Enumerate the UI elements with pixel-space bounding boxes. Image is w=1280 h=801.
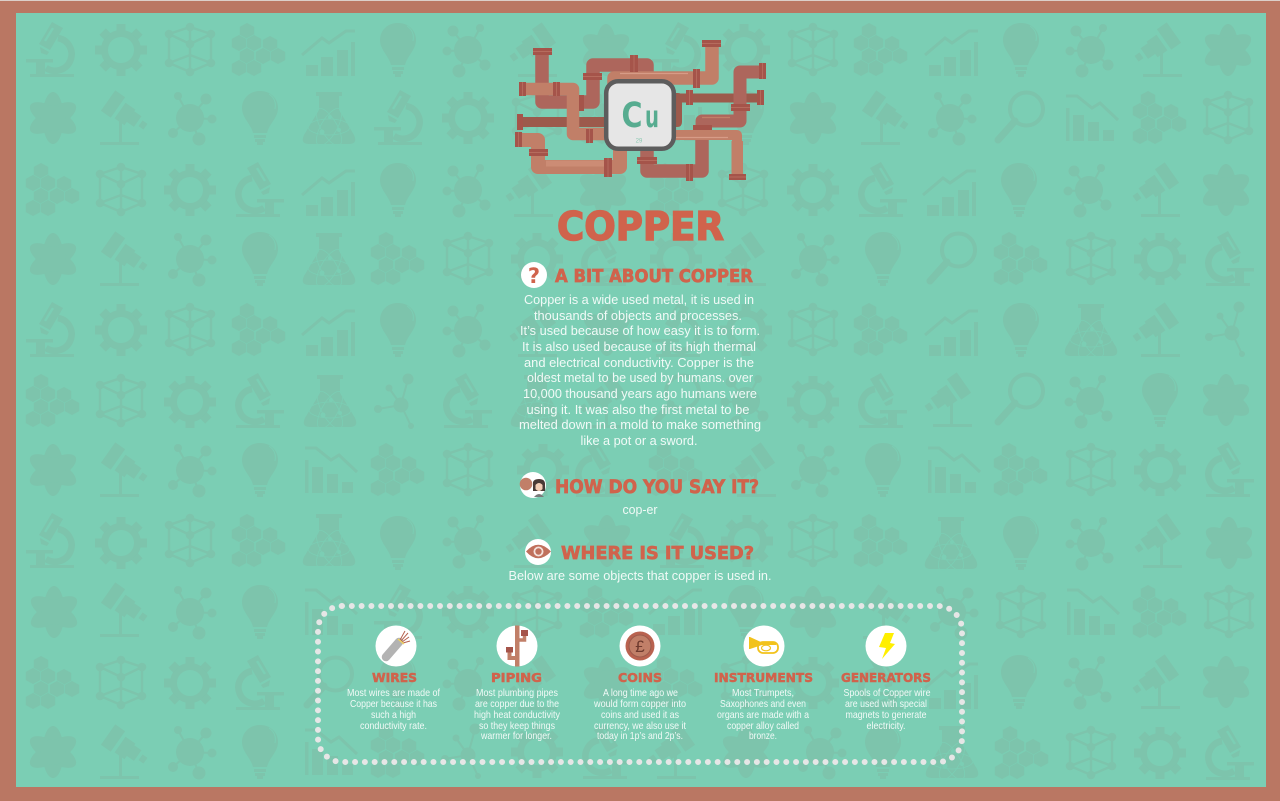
use: coins: [593, 626, 686, 742]
about copper text block: like a pot or a sword.: [580, 433, 698, 448]
description: Most Trumpets,: [732, 688, 794, 699]
description: bronze.: [749, 731, 777, 742]
icon: trumpet: [744, 626, 784, 666]
heading: how do you say it: HOW DO YOU SAY IT?: [555, 476, 759, 498]
description: such a high: [371, 710, 416, 721]
about copper text block: It is also used because of its high thermal: [522, 339, 756, 354]
about copper text block: melted down in a mold to make something: [519, 417, 761, 432]
description: currency, we also use it: [594, 721, 686, 732]
description: are copper due to the: [475, 699, 559, 710]
description: Copper because it has: [350, 699, 437, 710]
description: copper alloy called: [727, 721, 799, 732]
copper element tile: [606, 81, 674, 149]
pronunciation text: cop-er: [622, 502, 658, 517]
copper pipes illustration: [515, 40, 766, 181]
description: [844, 688, 931, 732]
use: piping: [474, 626, 561, 742]
use: generators: [841, 626, 931, 732]
about copper text block: thousands of objects and processes.: [534, 308, 742, 323]
description: [474, 688, 561, 742]
description: would form copper into: [593, 699, 686, 710]
description: so they keep things: [479, 721, 555, 732]
description: high heat conductivity: [474, 710, 561, 721]
description: [593, 688, 686, 742]
description: warmer for longer.: [480, 731, 552, 742]
icon: question mark: [521, 262, 547, 288]
description: Most wires are made of: [347, 688, 440, 699]
about copper text block: oldest metal to be used by humans. over: [527, 370, 754, 385]
copper element tile: C: [622, 96, 642, 136]
use: wires: [347, 626, 440, 732]
label: PIPING: [491, 670, 542, 685]
about copper text block: [519, 292, 761, 448]
label: WIRES: [372, 670, 417, 685]
about copper text block: 10,000 thousand years ago humans were: [523, 386, 757, 401]
about copper text block: It’s used because of how easy it is to form.: [520, 323, 760, 338]
use: instruments: [714, 626, 813, 742]
icon: speaking people: [520, 472, 546, 498]
top edge highlight: [0, 0, 1280, 1]
description: A long time ago we: [603, 688, 678, 699]
about copper text block: and electrical conductivity. Copper is the: [524, 355, 754, 370]
description: magnets to generate: [846, 710, 927, 721]
about copper text block: Copper is a wide used metal, it is used in: [524, 292, 754, 307]
about copper text block: using it. It was also the first metal to be: [526, 402, 750, 417]
icon: wire: [376, 626, 416, 666]
description: organs are made with a: [717, 710, 809, 721]
description: coins and used it as: [601, 710, 679, 721]
description: today in 1p’s and 2p’s.: [597, 731, 683, 742]
dotted uses panel border: [318, 606, 962, 762]
icon: eye: [525, 539, 551, 565]
icon: coin: £: [635, 637, 645, 656]
description: Most plumbing pipes: [476, 688, 558, 699]
copper element tile: 29: [636, 138, 643, 144]
label: INSTRUMENTS: [714, 670, 813, 685]
label: GENERATORS: [841, 670, 931, 685]
heading: where is it used: WHERE IS IT USED?: [561, 543, 754, 564]
description: Spools of Copper wire: [844, 688, 931, 699]
description: conductivity rate.: [360, 721, 427, 732]
intro text for uses: Below are some objects that copper is used in.: [508, 568, 772, 583]
description: [347, 688, 440, 732]
description: Saxophones and even: [720, 699, 806, 710]
copper element tile: u: [645, 100, 659, 135]
icon: pipe: [496, 626, 538, 666]
icon: question mark: ?: [528, 264, 540, 288]
description: electricity.: [866, 721, 906, 732]
heading: a bit about copper: A BIT ABOUT COPPER: [555, 266, 753, 287]
icon: lightning bolt: [866, 626, 906, 666]
description: [717, 688, 809, 742]
title: COPPER: [557, 204, 724, 250]
description: are used with special: [845, 699, 927, 710]
label: COINS: [618, 670, 662, 685]
